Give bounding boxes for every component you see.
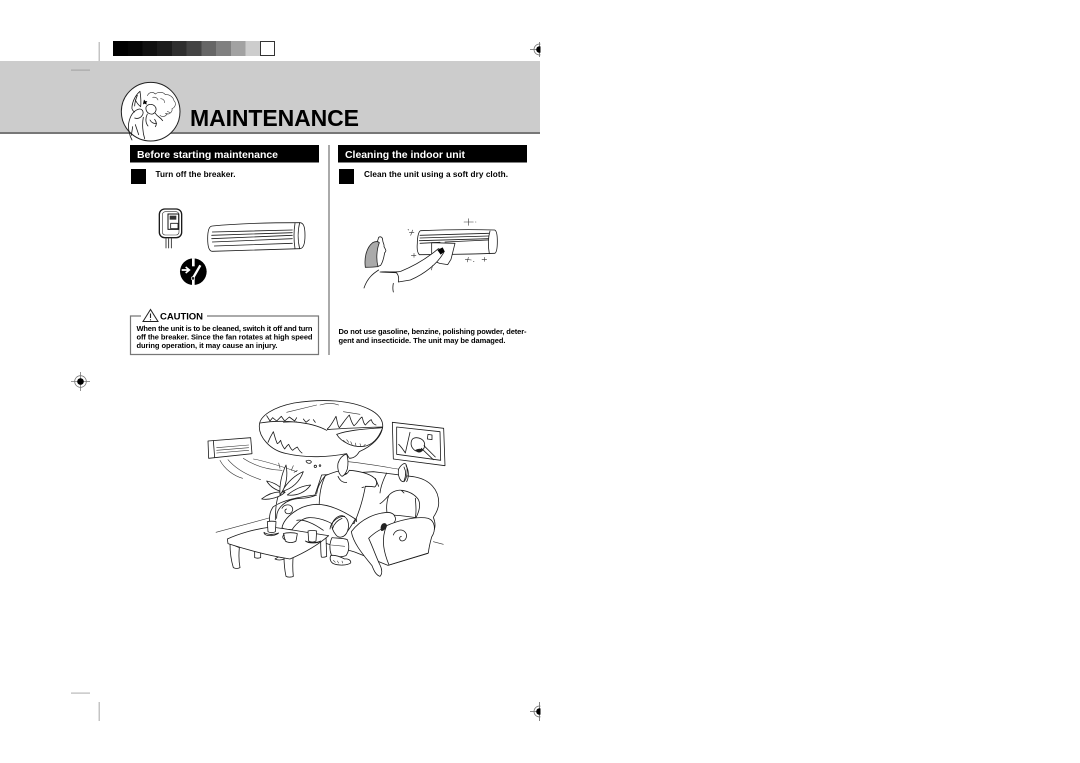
caution text: off the breaker. Since the fan rotates at high speed [136, 332, 313, 342]
registration mark: bottom right [530, 700, 546, 724]
icon: breaker switch box [159, 209, 182, 248]
step marker [339, 169, 354, 184]
caution text: during operation, it may cause an injury. [136, 341, 278, 350]
panel: cleaning the indoor unit [338, 145, 527, 345]
title: MAINTENANCE [190, 105, 359, 131]
warning text: Do not use gasoline, benzine, polishing powder, deter- [338, 327, 527, 336]
registration mark: top right [530, 40, 546, 60]
heading: cleaning the indoor unit: Cleaning the indoor unit [345, 149, 466, 161]
colour calibration bar [113, 41, 274, 56]
air flow lines [220, 458, 297, 480]
panel: before starting maintenance [130, 145, 319, 354]
wall picture [392, 422, 445, 466]
illustration: person wiping the unit [364, 219, 497, 292]
air conditioner [208, 438, 252, 458]
floor and wall lines [216, 462, 443, 544]
caution text [136, 324, 313, 350]
column divider [328, 145, 330, 355]
sofa [269, 472, 439, 565]
step text: Clean the unit using a soft dry cloth. [364, 170, 508, 179]
child [330, 516, 351, 565]
icon: warning triangle [143, 310, 158, 322]
header band [0, 61, 540, 134]
man [275, 454, 379, 560]
icon: indoor unit [208, 223, 305, 251]
coffee table with cups [227, 521, 329, 577]
sparkles [408, 219, 487, 270]
caution box [130, 310, 318, 354]
heading: cleaning the indoor unit [338, 145, 527, 162]
registration mark: middle left [71, 372, 90, 391]
thought bubble [259, 401, 383, 467]
caution label: CAUTION [160, 312, 203, 322]
woman [351, 464, 420, 576]
heading: before starting maintenance [130, 145, 319, 162]
icon: breaker off symbol [180, 258, 207, 285]
crop marks: bottom left [71, 692, 100, 721]
sofa right arm [383, 518, 434, 565]
warning text [338, 327, 527, 345]
step marker [131, 169, 146, 184]
warning text: gent and insecticide. The unit may be damaged. [338, 336, 506, 345]
icon: circular portrait of woman and child [121, 82, 180, 141]
heading: before starting maintenance: Before starting maintenance [137, 149, 278, 161]
crop mark: top left [98, 42, 100, 61]
plant [262, 463, 311, 520]
illustration: family relaxing in air-conditioned room [208, 401, 445, 577]
step text: Turn off the breaker. [156, 170, 236, 179]
caution text: When the unit is to be cleaned, switch it off and turn [136, 324, 313, 333]
